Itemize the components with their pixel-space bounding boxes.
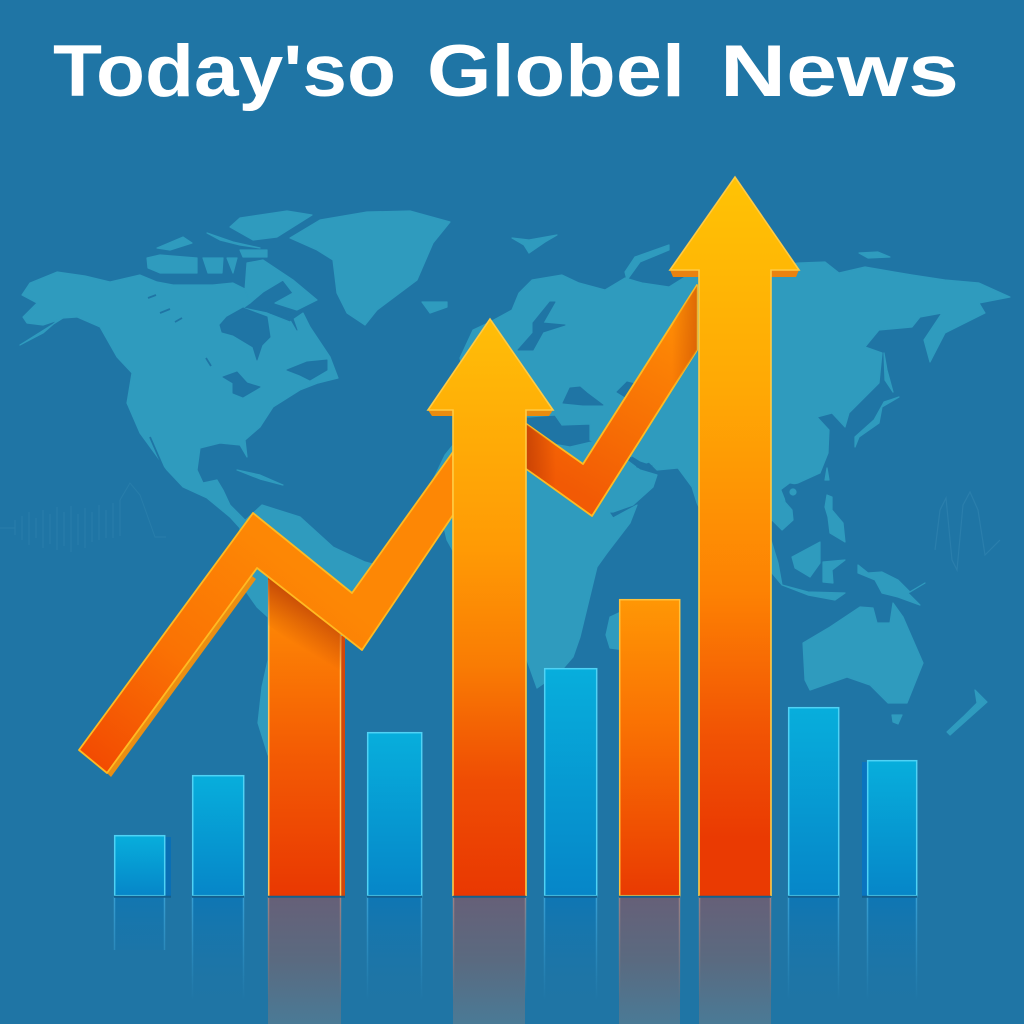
blue bar 4 <box>545 669 597 896</box>
map: australia and new zealand <box>803 603 987 735</box>
map: south america <box>240 505 395 755</box>
map: iceland and svalbard <box>422 235 890 313</box>
arrow: middle <box>428 319 553 896</box>
map: japan and sakhalin <box>825 353 899 480</box>
map: eurasia <box>460 262 1010 570</box>
bar side shades <box>165 636 867 896</box>
blue bar 1 <box>115 836 165 896</box>
reflection: orange bar edges <box>268 897 770 1010</box>
map: seas and lakes <box>220 302 800 500</box>
reflection: orange bars <box>268 897 771 1024</box>
map: southeast asia <box>771 495 925 605</box>
map: arctic islands <box>147 211 317 310</box>
faint waveform left <box>0 483 166 552</box>
bar chart <box>115 550 917 896</box>
map: north america <box>20 272 338 535</box>
blue bar 2 <box>193 776 244 896</box>
blue bar 5 <box>789 708 839 896</box>
arrow wing shadow <box>428 410 553 416</box>
reflections <box>114 897 917 1024</box>
trend band left <box>79 452 453 777</box>
reflection: blue bar edges <box>114 897 916 1010</box>
arrow wing shadow <box>670 270 799 277</box>
trend band middle <box>525 285 697 516</box>
floor contact shadows <box>114 896 917 898</box>
title: Today'so <box>53 31 396 112</box>
map: hainan <box>790 489 796 495</box>
blue bar 6 <box>868 761 917 896</box>
world map <box>20 211 1010 755</box>
blue bar 3 <box>368 733 422 896</box>
map: greenland <box>290 211 450 325</box>
map: cuba <box>237 470 283 485</box>
arrow: tall <box>670 177 799 896</box>
title: News <box>720 31 959 112</box>
zigzag trend line <box>79 285 697 777</box>
orange bar 3 <box>620 600 680 896</box>
title <box>53 31 959 112</box>
map: africa and arabia <box>433 440 657 688</box>
map: inland strokes <box>148 295 211 467</box>
reflection: blue bars <box>114 897 917 1024</box>
title: Globel <box>427 31 685 112</box>
map: novaya zemlya and madagascar <box>606 245 669 650</box>
faint waveform right <box>935 492 1000 570</box>
orange bar 1 <box>268 550 341 896</box>
